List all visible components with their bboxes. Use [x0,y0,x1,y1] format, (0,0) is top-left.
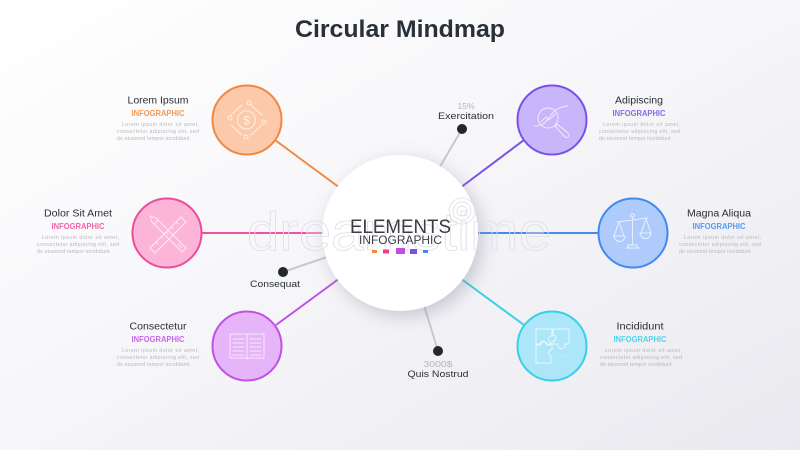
text: Incididunt: consectetur adipiscing elit, sed [600,355,682,361]
text: Dolor Sit Amet [37,208,119,255]
text: Adipiscing: Lorem ipsum dolor sit amet, [603,122,680,128]
text: Adipiscing: do eiusmod tempor incididunt. [599,136,672,142]
text: Magna Aliqua: consectetur adipiscing elit, sed [679,242,761,248]
icon: open book [230,334,264,359]
text: Dolor Sit Amet: Dolor Sit Amet [44,208,112,220]
icon: magnifier chart [535,106,569,137]
icon: pencil and ruler [150,216,186,253]
text: Magna Aliqua: INFOGRAPHIC [692,222,746,231]
node: Consectetur [212,312,282,380]
central circle [322,155,478,311]
text: Consectetur: INFOGRAPHIC [132,335,185,344]
text: Dolor Sit Amet: consectetur adipiscing elit, sed [37,242,119,248]
text: Consectetur: Consectetur [130,322,187,332]
watermark: dreamstime [247,202,551,262]
callout: Quis Nostrud: Quis Nostrud [408,369,468,380]
center label: INFOGRAPHIC [359,233,442,247]
icon: puzzle [536,329,569,363]
text: Lorem Ipsum: INFOGRAPHIC [132,109,185,118]
text: Dolor Sit Amet: INFOGRAPHIC [52,222,105,231]
text: Adipiscing: Adipiscing [615,96,663,106]
callout: Quis Nostrud [408,346,468,380]
text: Incididunt: Lorem ipsum dolor sit amet, [605,348,682,354]
text: Lorem Ipsum: Lorem ipsum dolor sit amet, [122,122,199,128]
text: Magna Aliqua: Lorem ipsum dolor sit amet, [684,235,761,241]
text: Dolor Sit Amet: Lorem ipsum dolor sit amet, [42,235,119,241]
text: Consectetur [117,322,199,368]
callout: Consequat [250,267,300,290]
text: Lorem Ipsum: consectetur adipiscing elit, sed [117,129,199,135]
text: Consectetur: Lorem ipsum dolor sit amet, [122,348,199,354]
callout: Consequat: Consequat [250,279,300,290]
text: Lorem Ipsum: do eiusmod tempor incididunt. [117,136,191,142]
text: Adipiscing [599,96,680,142]
node: Dolor Sit Amet [132,198,202,268]
text: Incididunt [600,322,682,368]
text: Consectetur: do eiusmod tempor incididunt. [117,362,191,368]
icon: dollar coin: $ [243,114,250,128]
connector lines [202,129,598,351]
text: Incididunt: do eiusmod tempor incididunt. [600,362,673,368]
callout: Exercitation: Exercitation [438,111,494,122]
callout: Exercitation [438,101,494,134]
text: Lorem Ipsum: Lorem Ipsum [128,96,188,106]
text: Adipiscing: INFOGRAPHIC [612,109,666,118]
title: Circular Mindmap [295,16,505,43]
text: Magna Aliqua: Magna Aliqua [687,208,751,220]
text: Lorem Ipsum [117,96,199,142]
icon: scales [614,214,651,248]
node: Lorem Ipsum [212,86,282,154]
node: Magna Aliqua [598,198,668,268]
callout: Exercitation: 15% [457,101,475,111]
node: Adipiscing [518,86,586,154]
text: Adipiscing: consectetur adipiscing elit, sed [599,129,680,135]
text: Dolor Sit Amet: do eiusmod tempor incididunt. [37,249,111,255]
text: Consectetur: consectetur adipiscing elit, sed [117,355,199,361]
callout: Quis Nostrud: 3000$ [424,359,453,369]
node: Incididunt [518,312,586,380]
text: Incididunt: Incididunt [616,322,664,332]
text: Magna Aliqua: do eiusmod tempor incididunt. [679,249,752,255]
text: Magna Aliqua [679,208,761,255]
center label: ELEMENTS [350,216,451,238]
center label [350,216,451,254]
text: Incididunt: INFOGRAPHIC [614,335,667,344]
